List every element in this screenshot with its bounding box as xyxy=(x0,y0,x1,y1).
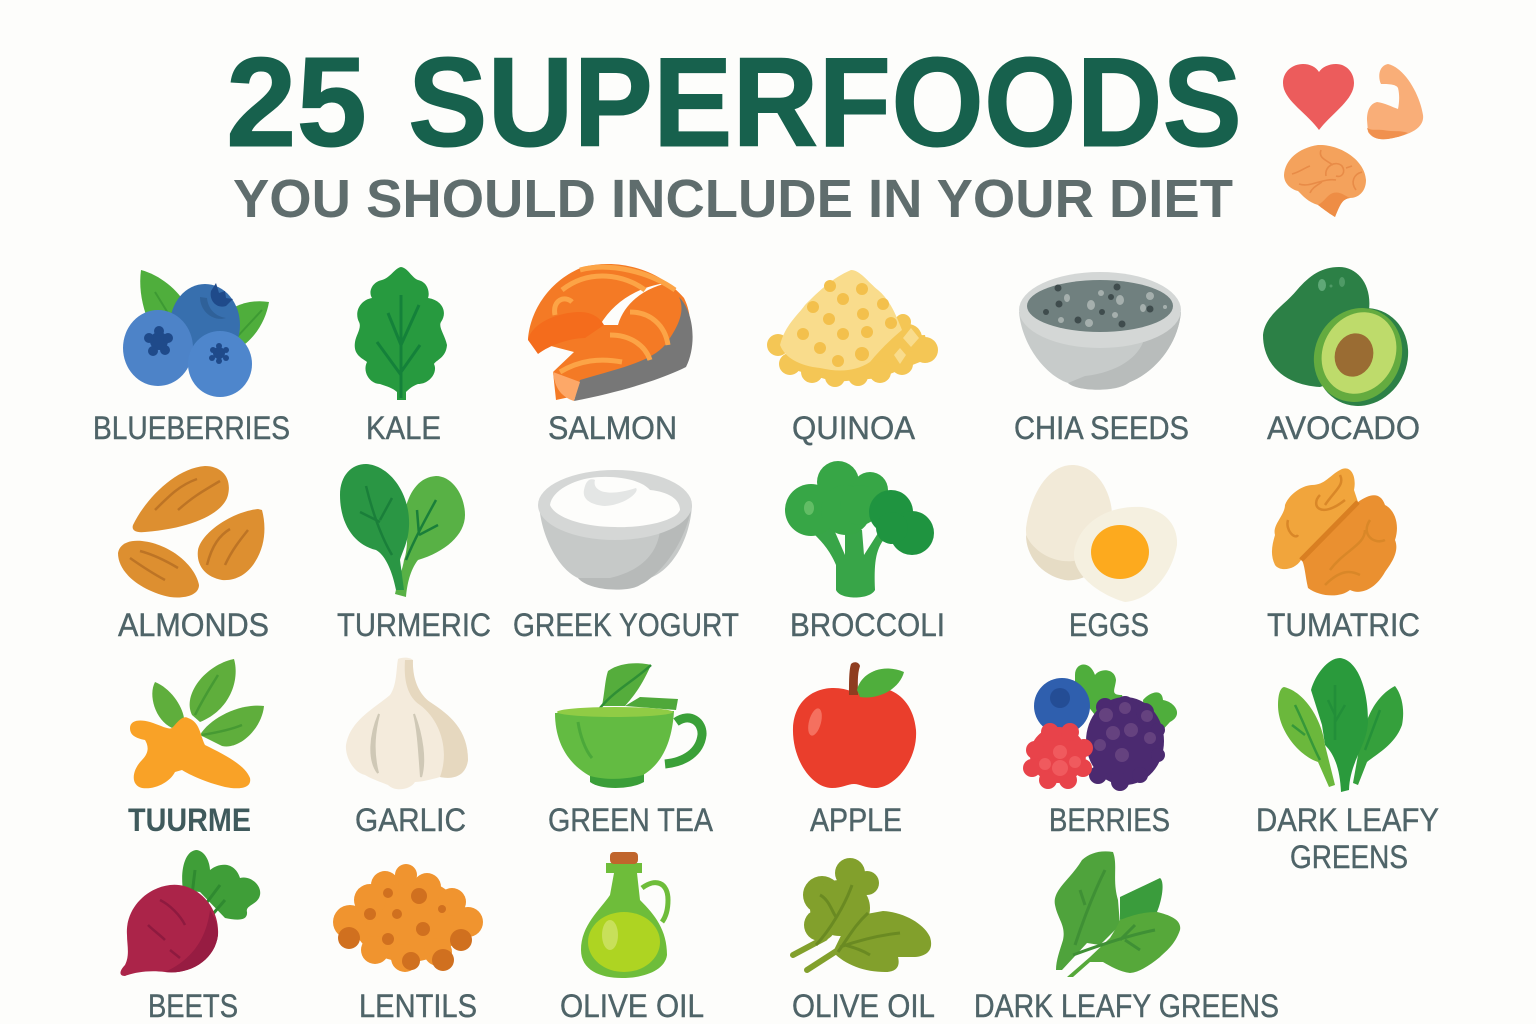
icon: quinoa pile xyxy=(767,270,938,387)
health icons xyxy=(1283,64,1423,217)
label: TUURME xyxy=(128,802,251,838)
food: berries xyxy=(1023,664,1177,838)
label: SALMON xyxy=(548,410,677,446)
food: quinoa xyxy=(767,270,938,446)
food: green tea xyxy=(548,663,714,838)
icon: apple xyxy=(793,662,916,788)
icon: blueberries xyxy=(123,270,269,397)
label: DARK LEAFY GREENS xyxy=(974,988,1279,1024)
label: AVOCADO xyxy=(1267,410,1420,446)
icon: broccoli xyxy=(785,461,934,598)
label: TURMERIC xyxy=(337,607,491,643)
label: GREEN TEA xyxy=(548,802,714,838)
icon: olive-green leaves xyxy=(793,858,931,972)
food: eggs xyxy=(1026,465,1177,643)
food: apple xyxy=(793,662,916,838)
label: GARLIC xyxy=(355,802,466,838)
label: BLUEBERRIES xyxy=(93,410,290,446)
icon: salmon steak xyxy=(528,264,693,401)
title: 25 xyxy=(226,31,367,173)
icon: brain xyxy=(1284,145,1366,217)
icon: walnut xyxy=(1272,468,1397,595)
food: avocado xyxy=(1263,267,1425,446)
icon: olive oil bottle xyxy=(581,852,668,978)
icon: dark leafy greens pair xyxy=(1055,851,1180,977)
icon: green tea cup xyxy=(555,663,702,788)
label: KALE xyxy=(366,410,441,446)
label: TUMATRIC xyxy=(1267,607,1420,643)
food: dark leafy greens (top) xyxy=(1256,658,1443,875)
label: OLIVE OIL xyxy=(792,988,935,1024)
label: QUINOA xyxy=(792,410,916,446)
food: salmon xyxy=(528,264,693,446)
label: BERRIES xyxy=(1049,802,1170,838)
food: lentils xyxy=(333,864,483,1024)
label: CHIA SEEDS xyxy=(1014,410,1189,446)
label: GREENS xyxy=(1290,839,1408,875)
label: OLIVE OIL xyxy=(560,988,704,1024)
food: beets xyxy=(120,850,260,1024)
food: almonds xyxy=(118,466,269,643)
label: EGGS xyxy=(1069,607,1149,643)
icon: kale leaf xyxy=(355,267,447,400)
icon: chia bowl xyxy=(1019,272,1181,390)
icon: heart xyxy=(1283,64,1354,130)
label: APPLE xyxy=(810,802,902,838)
title: SUPERFOODS xyxy=(408,31,1242,173)
food: tumatric (walnut) xyxy=(1267,468,1420,643)
food: olive oil bottle xyxy=(560,852,704,1024)
label: LENTILS xyxy=(359,988,477,1024)
food: kale xyxy=(355,267,447,446)
food: garlic xyxy=(346,658,468,838)
icon: yogurt bowl xyxy=(538,470,692,590)
food: chia seeds xyxy=(1014,272,1189,446)
icon: garlic xyxy=(346,658,468,789)
subtitle: YOU SHOULD INCLUDE IN YOUR DIET xyxy=(233,169,1233,229)
icon: flexed arm xyxy=(1367,64,1423,139)
label: GREEK YOGURT xyxy=(513,607,739,643)
icon: lentils pile xyxy=(333,864,483,972)
food: olive oil (greens) xyxy=(792,858,935,1024)
label: BEETS xyxy=(148,988,238,1024)
icon: dark leafy greens xyxy=(1278,658,1403,792)
label: ALMONDS xyxy=(118,607,269,643)
food: dark leafy greens (bottom) xyxy=(974,851,1279,1024)
icon: almonds xyxy=(118,466,264,598)
icon: spinach leaves xyxy=(340,464,465,597)
label: DARK LEAFY xyxy=(1256,802,1439,838)
food: turmeric (spinach) xyxy=(337,464,491,643)
food: tuurme (turmeric root) xyxy=(128,659,264,838)
food: greek yogurt xyxy=(513,470,739,643)
icon: avocado xyxy=(1263,267,1425,422)
food: blueberries xyxy=(93,270,290,446)
icon: turmeric root xyxy=(130,659,264,788)
icon: mixed berries xyxy=(1023,664,1177,791)
icon: beet xyxy=(120,850,260,976)
food: broccoli xyxy=(785,461,945,643)
label: BROCCOLI xyxy=(790,607,945,643)
icon: eggs xyxy=(1026,465,1177,602)
